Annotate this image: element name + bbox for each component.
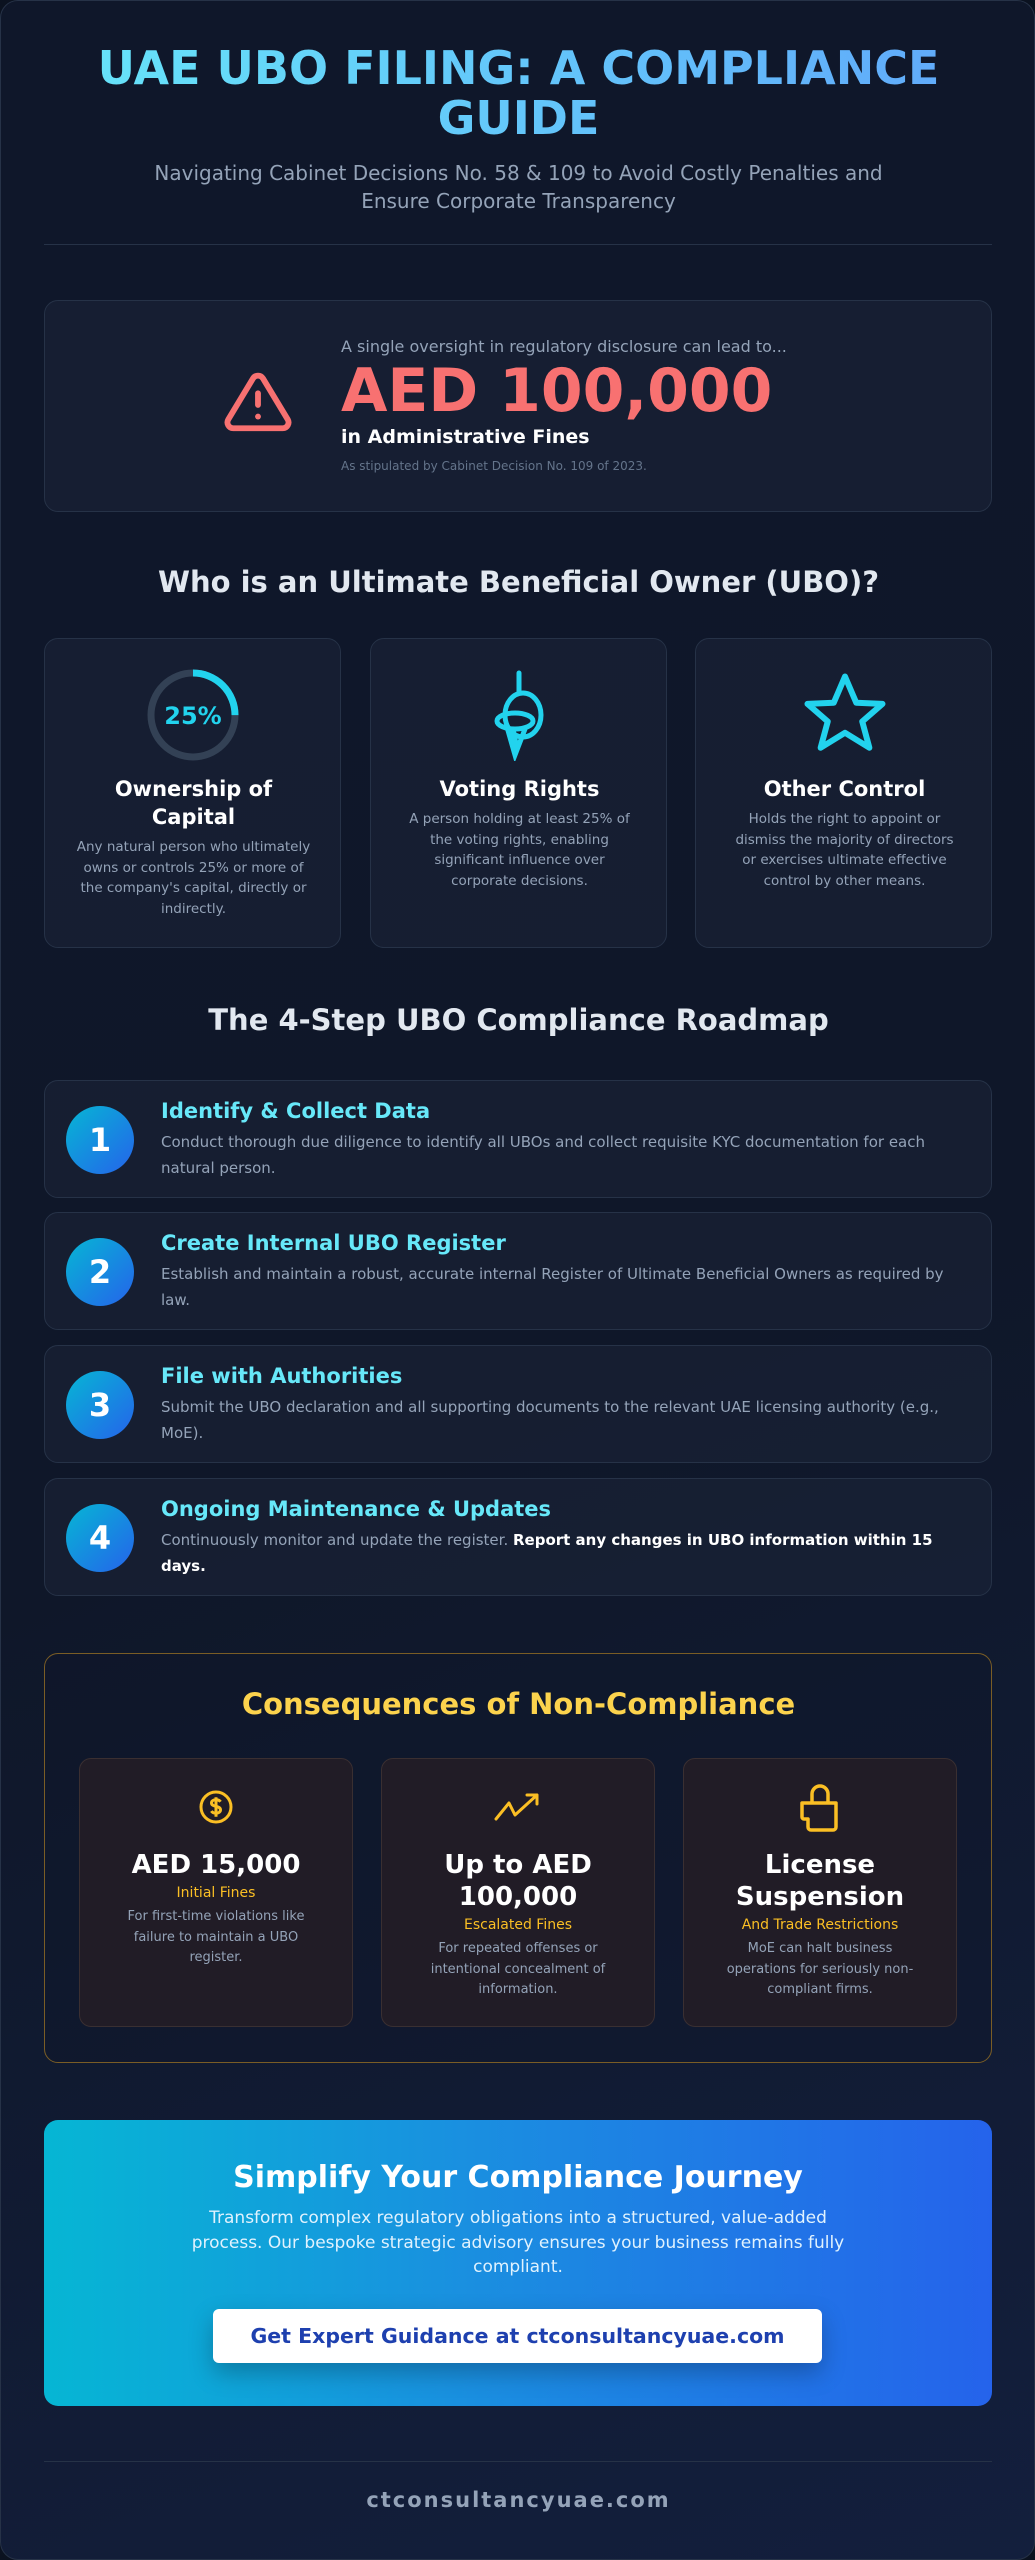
icon: star — [804, 674, 886, 751]
step 2: Create Internal UBO Register — [161, 1231, 506, 1255]
footer: ctconsultancyuae.com — [366, 2488, 671, 2512]
step 2 — [44, 1212, 992, 1330]
title: GUIDE — [438, 91, 599, 145]
heading: who is UBO: Who is an Ultimate Beneficial Owner (UBO)? — [158, 565, 879, 599]
panel: ownership: Capital — [152, 805, 235, 829]
title: UAE UBO FILING: A COMPLIANCE — [98, 41, 939, 95]
step 3: Submit the UBO declaration and all supporting documents to the relevant UAE licensing authority (e.g., MoE). — [161, 1398, 939, 1442]
icon: dollar — [200, 1790, 232, 1824]
card: escalated fines: For repeated offenses or intentional concealment of information. — [431, 1941, 605, 1997]
step 3: File with Authorities — [161, 1364, 402, 1388]
step 1: 1 — [89, 1121, 111, 1159]
icon: trend — [494, 1793, 539, 1821]
step 2: Establish and maintain a robust, accurate internal Register of Ultimate Beneficial Owners as required by law. — [161, 1265, 944, 1309]
card: escalated fines — [381, 1758, 655, 2027]
panel: other control — [695, 638, 992, 948]
card: license suspension — [683, 1758, 957, 2027]
CTA button — [213, 2309, 822, 2363]
heading: consequences: Consequences of Non-Compliance — [242, 1687, 795, 1721]
step 1 — [44, 1080, 992, 1198]
step 1: Identify & Collect Data — [161, 1099, 430, 1123]
panel: ownership — [44, 638, 341, 948]
card: license suspension: Suspension — [736, 1882, 904, 1912]
heading: roadmap: The 4-Step UBO Compliance Roadmap — [208, 1003, 829, 1037]
card: initial fines: AED 15,000 — [132, 1850, 300, 1880]
panel: ownership: Any natural person who ultimately owns or controls 25% or more of the company's capital, directly or indirectly. — [77, 839, 310, 916]
step 4: 4 — [89, 1519, 111, 1557]
icon: 25% ring: 25% — [164, 702, 222, 730]
CTA button: Get Expert Guidance at ctconsultancyuae.com — [250, 2324, 785, 2348]
title — [1, 43, 1035, 143]
icon: voting — [494, 670, 544, 761]
card: license suspension: MoE can halt business operations for seriously non-compliant firms. — [727, 1941, 913, 1997]
panel: consequences — [44, 1653, 992, 2063]
step 3: 3 — [89, 1386, 111, 1424]
icon: warning — [224, 372, 292, 432]
panel: other control: Other Control — [764, 777, 925, 801]
step 3 — [44, 1345, 992, 1463]
step 1: Conduct thorough due diligence to identify all UBOs and collect requisite KYC documentation for each natural person. — [161, 1133, 925, 1177]
panel: voting: Voting Rights — [440, 777, 599, 801]
card: initial fines: Initial Fines — [177, 1885, 255, 1901]
alert text: A single oversight in regulatory disclosure can lead to... — [341, 337, 787, 356]
panel: voting — [370, 638, 667, 948]
icon: 25% ring — [148, 670, 238, 760]
card: escalated fines: Escalated Fines — [464, 1917, 572, 1933]
panel: voting: A person holding at least 25% of the voting rights, enabling significant influence over corporate decisions. — [409, 811, 630, 888]
icon: lock — [800, 1784, 838, 1832]
step 4 — [44, 1478, 992, 1596]
step 4: Continuously monitor and update the register. Report any changes in UBO information within 15 days. — [161, 1531, 933, 1575]
panel: alert fine — [44, 300, 992, 512]
card: initial fines: For first-time violations like failure to maintain a UBO register. — [128, 1909, 304, 1965]
CTA heading: Simplify Your Compliance Journey — [233, 2160, 803, 2195]
panel: CTA — [44, 2120, 992, 2406]
alert text: in Administrative Fines — [341, 426, 590, 448]
card: escalated fines: 100,000 — [459, 1882, 577, 1912]
alert text: As stipulated by Cabinet Decision No. 109 of 2023. — [341, 459, 647, 473]
step 2: 2 — [89, 1253, 111, 1291]
subtitle: Navigating Cabinet Decisions No. 58 & 109 to Avoid Costly Penalties and Ensure Corporate Transparency — [154, 161, 883, 213]
alert text: AED 100,000 — [341, 356, 772, 426]
panel: other control: Holds the right to appoint or dismiss the majority of directors or exercises ultimate effective control by other means. — [735, 811, 954, 888]
CTA text: Transform complex regulatory obligations into a structured, value-added process. Our bespoke strategic advisory ensures your business remains fully compliant. — [192, 2208, 844, 2277]
panel: ownership: Ownership of — [115, 777, 272, 801]
alert text — [341, 337, 787, 473]
step 4: Ongoing Maintenance & Updates — [161, 1497, 551, 1521]
card: initial fines — [79, 1758, 353, 2027]
card: license suspension: License — [765, 1850, 875, 1880]
card: escalated fines: Up to AED — [444, 1850, 592, 1880]
card: license suspension: And Trade Restrictions — [742, 1917, 898, 1933]
